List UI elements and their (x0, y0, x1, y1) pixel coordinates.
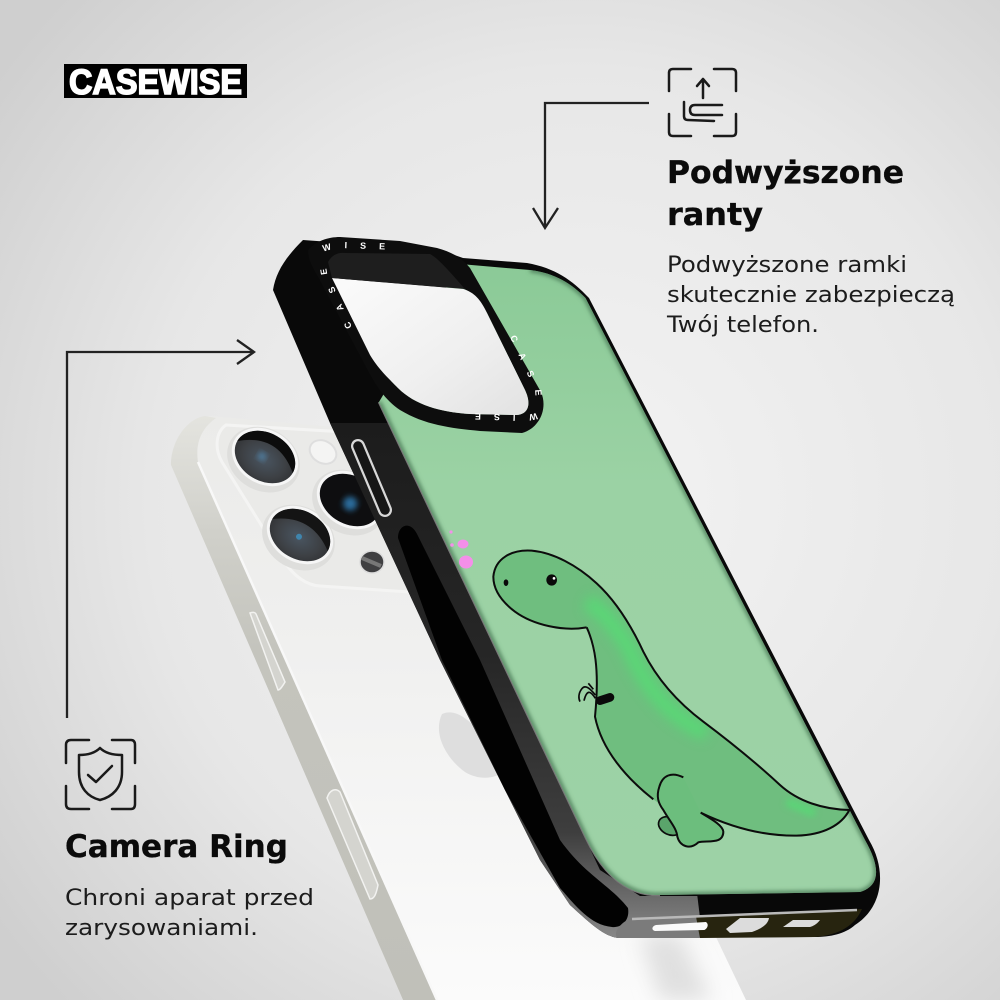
heading: Podwyższone ranty (667, 155, 904, 233)
flash (305, 435, 341, 469)
ring brand text upper: CASEWISE (320, 242, 385, 328)
camera plateau (217, 425, 410, 592)
dinosaur illustration (493, 551, 849, 847)
camera ring (320, 237, 544, 433)
ring brand text lower: CASEWISE (475, 336, 542, 421)
dino arm and claws (579, 683, 610, 702)
text: raised edges description (666, 253, 955, 338)
frame side slot (398, 526, 628, 927)
lidar sensor (360, 551, 384, 573)
green edge shadow (379, 270, 876, 895)
speaker opening (652, 922, 708, 931)
microphone opening (783, 920, 820, 927)
icon: shield (66, 740, 135, 809)
heading: Podwyższone ranty: Podwyższone (667, 155, 904, 191)
dino body (493, 551, 849, 836)
arrow: camera ring (67, 340, 254, 718)
translucent frame band (330, 423, 702, 938)
dino outline (493, 551, 849, 836)
icon: raised edges (669, 69, 736, 136)
text: camera ring description (65, 886, 314, 941)
lens 1 (215, 414, 312, 505)
logo: CASEWISE: CASEWISE (69, 63, 242, 102)
dino nostril (504, 579, 508, 586)
lens 3 (300, 457, 397, 548)
text: camera ring description: Chroni aparat przed (65, 886, 314, 911)
case outer shell (273, 240, 880, 938)
protective case (273, 240, 880, 938)
text: raised edges description: Twój telefon. (666, 313, 819, 338)
apple logo shadow (439, 712, 505, 778)
volume button (358, 446, 385, 510)
volume buttons (250, 612, 378, 899)
ring body (308, 237, 544, 433)
ring opening (332, 278, 528, 415)
pink hearts (449, 530, 473, 568)
text: raised edges description: skutecznie zabezpieczą (667, 283, 955, 308)
lens 2 (250, 492, 347, 583)
light lip line (632, 910, 857, 919)
text: camera ring description: zarysowaniami. (65, 916, 258, 941)
dino back toes (655, 813, 685, 839)
dino eye (546, 574, 557, 586)
dino back highlight (587, 602, 815, 813)
white phone (171, 414, 746, 1000)
bottom face left (616, 917, 700, 938)
arrow: raised edges (533, 103, 649, 228)
text: raised edges description: Podwyższone ramki (667, 253, 907, 278)
green back panel (379, 264, 876, 895)
lower shading streak (640, 935, 712, 1000)
bottom face right (696, 909, 862, 938)
ring inner shelf (328, 253, 465, 289)
dino leg (658, 775, 723, 847)
inner highlight line (198, 462, 437, 1000)
heading: Camera Ring: Camera Ring (65, 829, 288, 865)
heading: Podwyższone ranty: ranty (667, 197, 763, 233)
phone back panel (172, 416, 746, 1000)
green rim line (379, 402, 660, 895)
bottom black lip (697, 890, 875, 918)
phone side band (171, 416, 437, 1000)
usb port opening (726, 918, 769, 933)
